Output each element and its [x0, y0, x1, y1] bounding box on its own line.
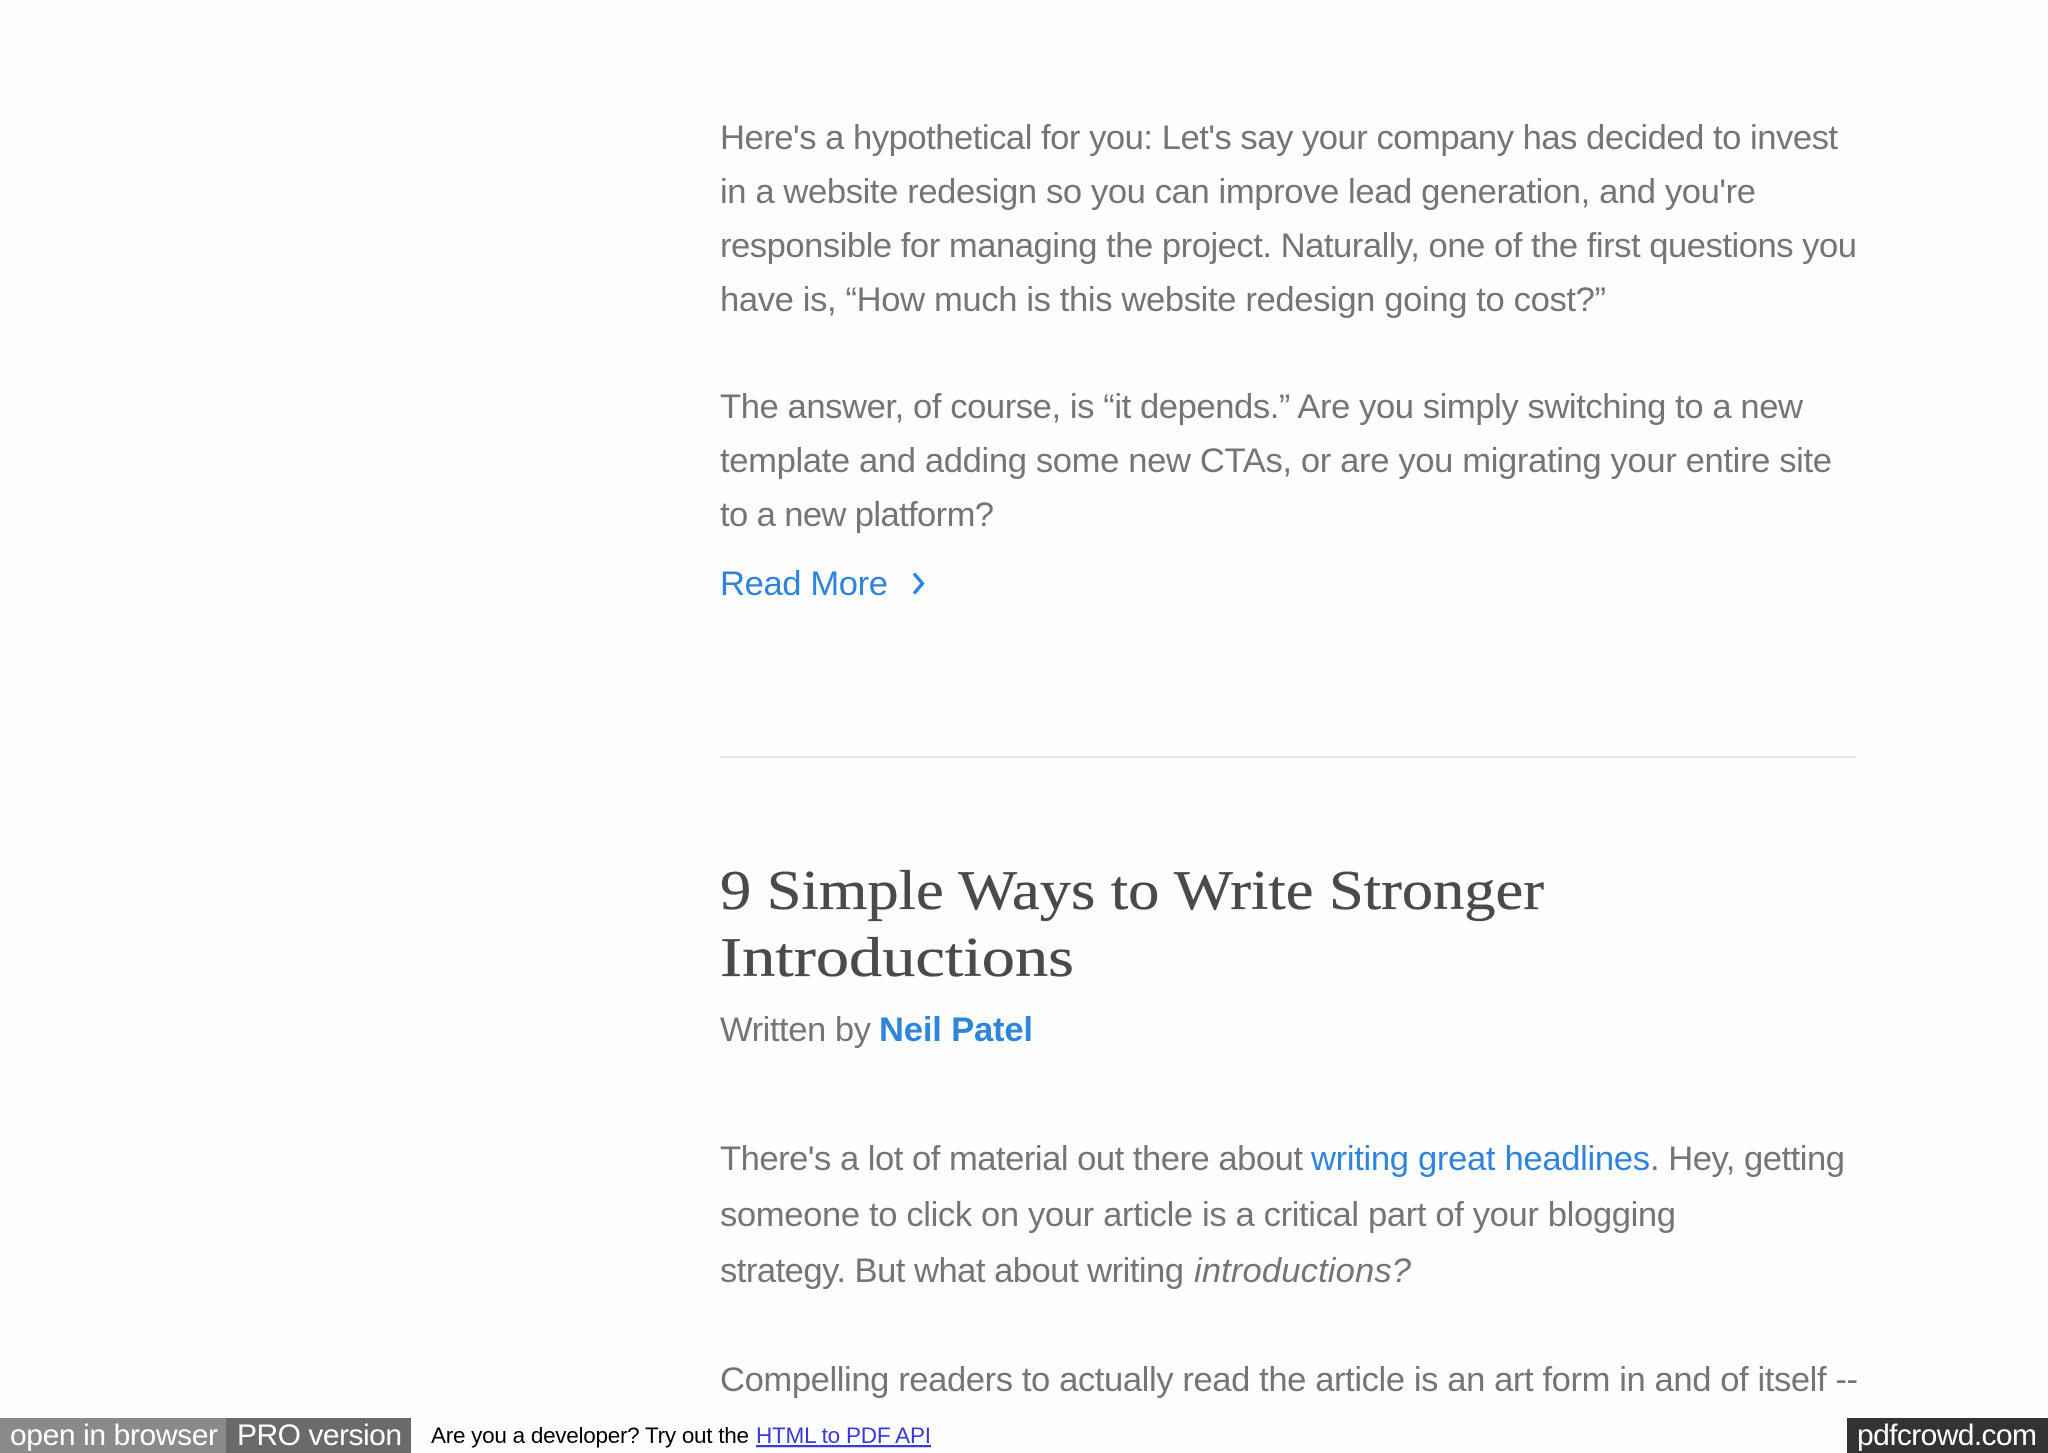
text block: second article paragraph one: introductions? — [1194, 1252, 1412, 1290]
heading: article title: 9 Simple Ways to Write Stronger — [720, 860, 1544, 922]
text block: second article paragraph one: writing great headlines — [1310, 1140, 1650, 1178]
text block: first article paragraph two: template and adding some new CTAs, or are you migrating your entire site — [720, 442, 1832, 480]
text block: second article paragraph one: . Hey, getting — [1650, 1140, 1845, 1178]
byline: Written by — [720, 1011, 872, 1049]
text block: second article paragraph two: Compelling readers to actually read the article is an art form in and of itself -- — [720, 1361, 1858, 1399]
text block: first article paragraph two — [720, 388, 1832, 534]
text block: first article paragraph one: have is, “How much is this website redesign going to cost?” — [720, 281, 1606, 319]
heading: article title — [720, 860, 1544, 989]
text block: second article paragraph one — [720, 1140, 1845, 1290]
link: read more with chevron: Read More — [720, 565, 888, 603]
footer promo text — [431, 1423, 931, 1448]
heading: article title: Introductions — [720, 927, 1074, 989]
text block: first article paragraph two: to a new platform? — [720, 496, 994, 534]
text block: first article paragraph one: Here's a hypothetical for you: Let's say your company has decided to invest — [720, 119, 1838, 157]
text block: first article paragraph two: The answer, of course, is “it depends.” Are you simply switching to a new — [720, 388, 1804, 426]
text block: first article paragraph one: responsible for managing the project. Naturally, one of the first questions you — [720, 227, 1857, 265]
badge: pdfcrowd.com: pdfcrowd.com — [1857, 1419, 2037, 1452]
footer promo text: Are you a developer? Try out the — [431, 1423, 749, 1448]
byline — [720, 1011, 1033, 1049]
text block: first article paragraph one — [720, 119, 1857, 319]
text block: second article paragraph one: strategy. But what about writing — [720, 1252, 1184, 1290]
footer promo text: HTML to PDF API — [756, 1423, 931, 1448]
button: PRO version: PRO version — [237, 1419, 402, 1452]
text block: second article paragraph one: someone to click on your article is a critical part of your blogging — [720, 1196, 1676, 1234]
text block: second article paragraph one: There's a lot of material out there about — [720, 1140, 1303, 1178]
byline: Neil Patel — [879, 1011, 1033, 1049]
text block: first article paragraph one: in a website redesign so you can improve lead generation, and you're — [720, 173, 1756, 211]
button: open in browser: open in browser — [10, 1419, 218, 1452]
